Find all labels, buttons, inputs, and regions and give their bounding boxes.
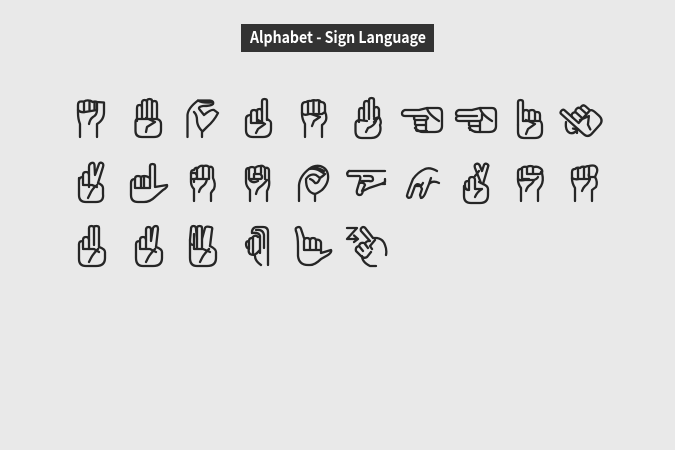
icon: letter L: [131, 164, 167, 202]
icon: letter M: [191, 166, 215, 201]
icon: letter U: [79, 226, 105, 266]
icon: letter H: [456, 108, 496, 132]
icon: letter P: [347, 171, 385, 195]
icon: letter J: [560, 95, 604, 138]
icon: letter G: [402, 108, 442, 132]
icon: letter W: [190, 226, 216, 266]
icon: letter B: [136, 99, 161, 137]
icon: letter S: [518, 166, 543, 201]
icon: letter Q: [407, 168, 439, 198]
icon: letter Y: [296, 227, 331, 265]
icon: letter K: [79, 163, 103, 202]
icon: letter A: [78, 100, 104, 137]
icon: letter V: [136, 226, 162, 266]
icon: letter C: [188, 100, 218, 137]
icon: letter O: [299, 166, 328, 201]
icon: letter E: [302, 100, 326, 137]
icon: letter F: [356, 98, 381, 138]
icon: letter I: [518, 100, 542, 138]
icon: letter X: [246, 227, 268, 265]
icon: letter N: [246, 166, 269, 201]
title: Alphabet - Sign Language: [249, 24, 426, 48]
icon: letter T: [572, 166, 597, 201]
icon: letter Z: [347, 227, 386, 266]
icon: letter R: [464, 164, 488, 203]
icon: letter D: [246, 99, 271, 137]
